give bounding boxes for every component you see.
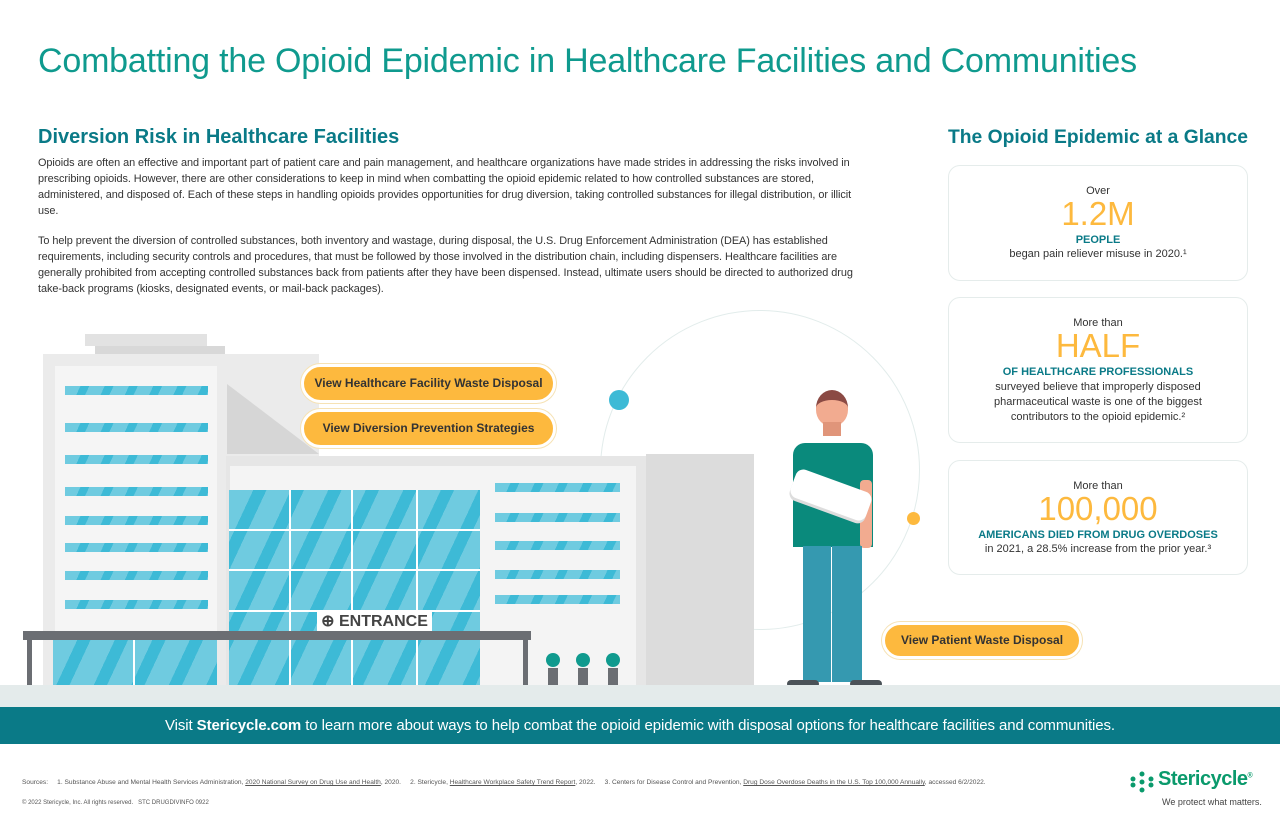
logo: stericycle (1130, 768, 1262, 807)
sign: entrance: ⊕ ENTRANCE (321, 613, 428, 630)
stat card: half: surveyed believe that improperly disposed (995, 381, 1201, 393)
banner: call to action: Visit Stericycle.com to learn more about ways to help combat the opioid epidemic with disposal options for healthcare facilities and communities. (165, 717, 1115, 734)
logo: stericycle: Stericycle® (1158, 768, 1252, 790)
stat card: 100,000: in 2021, a 28.5% increase from the prior year.³ (985, 543, 1211, 555)
title: Combatting the Opioid Epidemic in Healthcare Facilities and Communities (38, 42, 1137, 80)
stat card: half: pharmaceutical waste is one of the biggest (994, 396, 1202, 408)
button: facility waste disposal (301, 364, 556, 403)
illustration: orbit circle (600, 310, 920, 630)
icon: yellow dot (907, 512, 920, 525)
heading: diversion risk: Diversion Risk in Healthcare Facilities (38, 126, 399, 148)
stat card: 100,000 (948, 460, 1248, 575)
text block: intro paragraphs: Opioids are often an effective and important part of patient care and pain management, and healthcare organizations have made strides in addressing the risks involved in prescribing opioids. However, there are other considerations to keep in mind when combatting the opioid epidemic related to how controlled substances are stored, administered, and disposed of. Each of these steps in handling opioids provides opportunities for drug diversion, taking controlled substances for illegal distribution, or illicit use. (38, 157, 851, 217)
illustration: patient with sling (787, 390, 882, 685)
stat card: half (948, 297, 1248, 443)
stat card: 1.2M: PEOPLE (1076, 234, 1120, 246)
stat card: half: OF HEALTHCARE PROFESSIONALS (1003, 366, 1193, 378)
heading: at a glance: The Opioid Epidemic at a Glance (948, 127, 1248, 148)
icon: blue dot (609, 390, 629, 410)
button: diversion prevention (301, 409, 556, 448)
stat card: 100,000: 100,000 (1038, 490, 1158, 527)
section: diversion risk (38, 126, 853, 295)
stat card: 100,000: More than (1073, 480, 1123, 492)
text: sources: Sources: 1. Substance Abuse and Mental Health Services Administration, 2020 National Survey on Drug Use and Health, 2020. 2. Stericycle, Healthcare Workplace Safety Trend Report, 2022. 3. Centers for Disease Control and Prevention, Drug Dose Overdose Deaths in the U.S. Top 100,000 Annually, accessed 6/2/2022. (22, 779, 986, 786)
button: facility waste disposal: View Healthcare Facility Waste Disposal (314, 376, 543, 390)
text: copyright: © 2022 Stericycle, Inc. All rights reserved. STC DRUGDIVINFO 0922 (22, 800, 209, 806)
stat card: half: HALF (1056, 327, 1140, 364)
stat card: 1.2M: 1.2M (1061, 195, 1135, 232)
text block: intro paragraphs: To help prevent the diversion of controlled substances, both inventory and wastage, during disposal, the U.S. Drug Enforcement Administration (DEA) has established requirements, including security controls and procedures, that must be followed by those involved in the distribution chain, including dispensers. Healthcare facilities are generally prohibited from accepting controlled substances back from patients after they have been dispensed. Instead, ultimate users should be directed to authorized drug take-back programs (kiosks, designated events, or mail-back packages). (38, 235, 853, 295)
stat card: 1.2M: began pain reliever misuse in 2020.¹ (1009, 248, 1187, 260)
banner: call to action (0, 707, 1280, 744)
text block: intro paragraphs (38, 157, 853, 295)
stat card: 1.2M (948, 165, 1248, 281)
ground strip (0, 685, 1280, 707)
logo: stericycle: We protect what matters. (1162, 797, 1262, 807)
stat card: 100,000: AMERICANS DIED FROM DRUG OVERDOSES (978, 529, 1218, 541)
button: patient waste disposal (882, 622, 1082, 659)
stat card: half: contributors to the opioid epidemic.² (1011, 411, 1185, 423)
stat card: half: More than (1073, 317, 1123, 329)
button: patient waste disposal: View Patient Waste Disposal (901, 633, 1063, 647)
illustration: hospital building (23, 334, 754, 685)
stat card: 1.2M: Over (1086, 185, 1110, 197)
button: diversion prevention: View Diversion Prevention Strategies (323, 421, 534, 435)
